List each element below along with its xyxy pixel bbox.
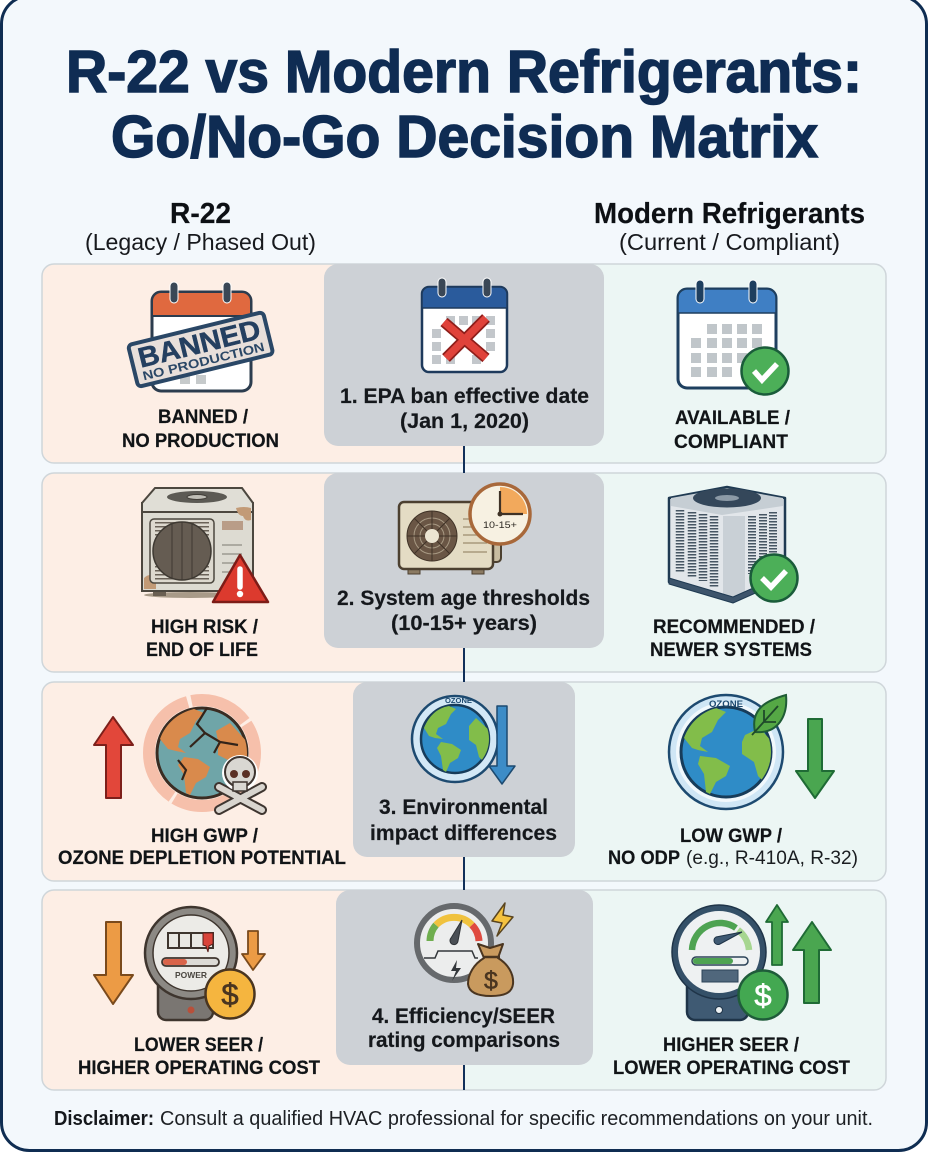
center cell: system age <box>324 473 604 648</box>
title: R-22 vs Modern Refrigerants: <box>66 39 862 105</box>
icon: available calendar with check <box>678 280 788 394</box>
label: banned: NO PRODUCTION <box>122 431 279 452</box>
icon: aged AC unit with clock: 10-15+ <box>483 520 517 531</box>
icon: old AC unit with warning <box>142 488 268 602</box>
center label: EPA ban date <box>340 384 589 433</box>
warning triangle <box>213 555 268 602</box>
center label: environmental <box>370 795 557 845</box>
label: high risk: END OF LIFE <box>146 640 258 661</box>
center label: EPA ban date: 1. EPA ban effective date <box>340 384 589 408</box>
arrow: small up <box>766 905 788 965</box>
icon: modern meter with green dollar <box>672 905 788 1020</box>
column heading: Modern Refrigerants <box>594 198 865 255</box>
label: high GWP: OZONE DEPLETION POTENTIAL <box>58 848 346 869</box>
center label: environmental: impact differences <box>370 821 557 845</box>
dollar coin <box>206 970 254 1018</box>
center label: system age <box>337 586 590 635</box>
disclaimer: Disclaimer: <box>54 1108 154 1130</box>
icon: modern meter with green dollar: $ <box>754 978 772 1013</box>
center label: EPA ban date: (Jan 1, 2020) <box>400 409 529 433</box>
icon: ozone globe with blue arrow <box>412 696 515 784</box>
icon: healthy globe with leaf: OZONE <box>709 699 743 709</box>
stamp: banned, no production <box>128 312 273 387</box>
icon: aged AC unit with clock <box>399 484 530 574</box>
label: recommended: NEWER SYSTEMS <box>650 640 812 661</box>
disclaimer: Consult a qualified HVAC professional for specific recommendations on your unit. <box>160 1108 873 1130</box>
icon: efficiency gauge with money bag <box>417 903 513 996</box>
icon: power meter with dollar coin: $ <box>221 977 239 1012</box>
label: low GWP: NO ODP <box>608 848 680 869</box>
center cell: environmental <box>353 682 575 857</box>
label: recommended <box>650 617 816 661</box>
label: high GWP: HIGH GWP / <box>151 826 259 847</box>
lightning bolt <box>492 903 513 936</box>
row 4 panel: efficiency <box>42 890 886 1090</box>
arrow: lower SEER down <box>94 922 133 1004</box>
center cell: EPA ban <box>324 264 604 446</box>
label: high GWP <box>58 826 346 869</box>
label: low GWP: LOW GWP / <box>680 826 783 847</box>
label: higher SEER: HIGHER SEER / <box>663 1035 800 1056</box>
label: banned <box>122 407 279 452</box>
label: lower SEER <box>78 1035 320 1079</box>
icon: new AC unit with check <box>669 487 798 603</box>
stamp: banned, no production: NO PRODUCTION <box>141 340 266 383</box>
label: higher SEER <box>613 1035 850 1079</box>
money bag <box>468 944 513 996</box>
center label: efficiency <box>368 1004 560 1052</box>
clock <box>470 484 530 544</box>
icon: ozone globe with blue arrow: OZONE <box>445 696 472 705</box>
skull and crossbones <box>219 787 262 810</box>
label: banned: BANNED / <box>158 407 249 428</box>
icon: healthy globe with leaf <box>669 695 786 809</box>
green dollar coin <box>738 970 788 1020</box>
arrow: high GWP up <box>94 717 133 798</box>
center cell: efficiency <box>336 890 593 1065</box>
icon: efficiency gauge with money bag: $ <box>484 967 498 995</box>
center label: efficiency: 4. Efficiency/SEER <box>372 1004 555 1028</box>
center label: efficiency: rating comparisons <box>368 1028 560 1052</box>
icon: cracked globe with skull <box>149 700 262 810</box>
column heading: R-22: (Legacy / Phased Out) <box>85 229 316 255</box>
label: recommended: RECOMMENDED / <box>653 617 816 638</box>
icon: calendar with red X <box>422 278 507 372</box>
stamp: banned, no production: BANNED <box>135 314 264 374</box>
center label: system age: 2. System age thresholds <box>337 586 590 610</box>
column heading: R-22: R-22 <box>170 198 231 230</box>
icon: banned calendar <box>128 282 273 391</box>
arrow: large up <box>793 922 831 1003</box>
column heading: R-22 <box>85 198 316 255</box>
row 2 panel: system age <box>42 473 886 672</box>
icon: power meter with dollar coin: POWER <box>175 970 207 980</box>
label: low GWP: (e.g., R-410A, R-32) <box>686 848 858 869</box>
label: lower SEER: LOWER SEER / <box>134 1035 264 1056</box>
row 3 panel: environmental <box>42 682 886 881</box>
title: Go/No-Go Decision Matrix <box>111 104 818 170</box>
arrow: low GWP down <box>796 719 834 798</box>
row 1 panel: EPA ban <box>42 264 886 463</box>
title <box>66 39 862 170</box>
label: available: COMPLIANT <box>674 432 788 453</box>
center label: system age: (10-15+ years) <box>391 611 537 635</box>
label: available: AVAILABLE / <box>675 408 791 429</box>
column heading: Modern Refrigerants: Modern Refrigerants <box>594 198 865 230</box>
icon: power meter with dollar coin <box>145 907 254 1020</box>
label: high risk <box>146 617 259 661</box>
label: higher SEER: LOWER OPERATING COST <box>613 1058 850 1079</box>
center label: environmental: 3. Environmental <box>379 795 548 819</box>
leaf <box>754 695 786 732</box>
column heading: Modern Refrigerants: (Current / Compliant) <box>619 229 840 255</box>
label: lower SEER: HIGHER OPERATING COST <box>78 1058 320 1079</box>
label: low GWP <box>608 826 858 869</box>
label: available <box>674 408 791 453</box>
arrow: small down <box>242 931 265 970</box>
label: high risk: HIGH RISK / <box>151 617 259 638</box>
